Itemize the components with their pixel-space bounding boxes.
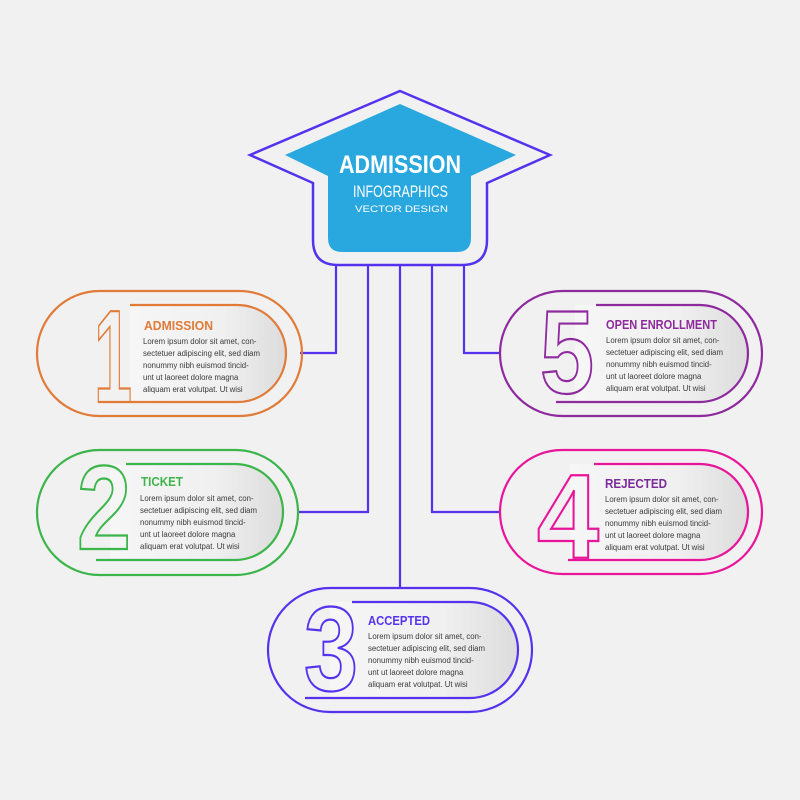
panel 4: rejected: aliquam erat volutpat. Ut wisi (605, 543, 705, 552)
panel 3: accepted: ACCEPTED (368, 613, 430, 628)
panel 5: open enrollment: 5 (540, 287, 594, 419)
panel 2: ticket: nonummy nibh euismod tincid- (140, 518, 246, 527)
title: ADMISSION (339, 151, 461, 179)
panel 3: accepted: unt ut laoreet dolore magna (368, 668, 464, 677)
panel 5: open enrollment: unt ut laoreet dolore magna (606, 372, 702, 381)
panel 4: rejected (500, 450, 762, 584)
panel 1: admission: aliquam erat volutpat. Ut wisi (143, 385, 243, 394)
panel 4: rejected: sectetuer adipiscing elit, sed diam (605, 507, 722, 516)
panel 5: open enrollment: sectetuer adipiscing elit, sed diam (606, 348, 723, 357)
panel 1: admission: nonummy nibh euismod tincid- (143, 361, 249, 370)
panel 2: ticket: TICKET (141, 474, 183, 489)
panel 5: open enrollment: aliquam erat volutpat. Ut wisi (606, 384, 706, 393)
panel 4: rejected: Lorem ipsum dolor sit amet, con- (605, 495, 719, 504)
connector lines (297, 265, 500, 588)
panel 2: ticket: aliquam erat volutpat. Ut wisi (140, 542, 240, 551)
panel 3: accepted: 3 (304, 582, 358, 716)
panel 2: ticket: 2 (77, 441, 131, 575)
graduation cap header (250, 91, 550, 265)
panel 4: rejected: unt ut laoreet dolore magna (605, 531, 701, 540)
panel 5: open enrollment: OPEN ENROLLMENT (606, 317, 717, 332)
panel 5: open enrollment: nonummy nibh euismod tincid- (606, 360, 712, 369)
panel 3: accepted: aliquam erat volutpat. Ut wisi (368, 680, 468, 689)
panel 1: admission: ADMISSION (144, 318, 213, 333)
graduation cap header: INFOGRAPHICS (353, 182, 448, 201)
panel 3: accepted: nonummy nibh euismod tincid- (368, 656, 474, 665)
panel 1: admission: unt ut laoreet dolore magna (143, 373, 239, 382)
panel 3: accepted: sectetuer adipiscing elit, sed diam (368, 644, 485, 653)
panel 3: accepted: Lorem ipsum dolor sit amet, con- (368, 632, 482, 641)
panel 2: ticket: sectetuer adipiscing elit, sed diam (140, 506, 257, 515)
panel 3: accepted (268, 582, 532, 716)
panel 1: admission: 1 (94, 283, 132, 430)
panel 2: ticket: unt ut laoreet dolore magna (140, 530, 236, 539)
panel 4: rejected: nonummy nibh euismod tincid- (605, 519, 711, 528)
panel 1: admission: sectetuer adipiscing elit, sed diam (143, 349, 260, 358)
panel 5: open enrollment (500, 287, 762, 419)
panel 2: ticket (37, 441, 298, 575)
panel 1: admission (37, 283, 302, 430)
panel 5: open enrollment: Lorem ipsum dolor sit amet, con- (606, 336, 720, 345)
panel 4: rejected: 4 (537, 450, 599, 584)
panel 1: admission: Lorem ipsum dolor sit amet, con- (143, 337, 257, 346)
panel 4: rejected: REJECTED (605, 476, 667, 491)
panel 2: ticket: Lorem ipsum dolor sit amet, con- (140, 494, 254, 503)
graduation cap header: VECTOR DESIGN (355, 204, 448, 214)
